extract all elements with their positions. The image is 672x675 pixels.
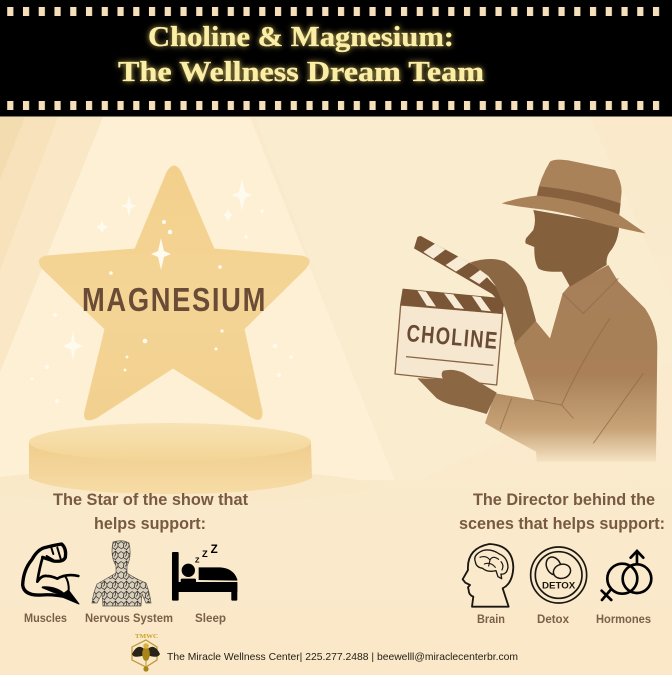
right icon labels (477, 612, 651, 626)
left heading: helps support: (94, 514, 206, 533)
upper hand (470, 259, 536, 343)
clapper stick (414, 236, 504, 307)
film strip title band (0, 0, 672, 116)
coat (485, 265, 657, 462)
title: Choline & Magnesium: (148, 21, 454, 53)
right icon labels: Brain (477, 612, 505, 626)
hat band (537, 186, 621, 214)
star sparkles (31, 179, 293, 403)
star label: MAGNESIUM (82, 281, 267, 318)
icon: brain (463, 544, 513, 607)
title (118, 21, 484, 88)
left icon labels: Sleep (195, 611, 226, 625)
icon: muscles (23, 544, 79, 604)
sprocket holes (7, 7, 662, 110)
icon: sleep (172, 543, 237, 601)
icon: detox (531, 547, 587, 603)
stage spotlights background (0, 117, 672, 503)
icon: nervous system (92, 541, 151, 606)
right heading: scenes that helps support: (459, 514, 665, 533)
title: The Wellness Dream Team (118, 56, 484, 88)
right heading: The Director behind the (473, 490, 655, 509)
snore letters: Z (195, 555, 200, 564)
left heading: The Star of the show that (53, 490, 248, 509)
icon: sleep: Z (202, 549, 208, 559)
director silhouette with clapperboard (395, 160, 657, 462)
icon: hormones (602, 551, 651, 600)
right icon labels: Hormones (596, 612, 651, 626)
footer logo: TMWC (135, 633, 158, 640)
clapperboard (395, 236, 505, 385)
icon: sleep: Z (211, 543, 218, 556)
footer logo (132, 633, 160, 672)
left icon labels: Nervous System (85, 611, 173, 625)
clapper label: CHOLINE (405, 320, 499, 355)
podium (29, 423, 312, 494)
footer contact text: The Miracle Wellness Center| 225.277.2488 | beewelll@miraclecenterbr.com (167, 651, 518, 663)
left icon labels (24, 611, 226, 625)
left icon labels: Muscles (24, 611, 67, 625)
board (395, 305, 503, 385)
right icon labels: Detox (537, 612, 569, 626)
right heading (459, 490, 665, 533)
coat folds (500, 278, 643, 443)
hat (502, 160, 646, 233)
head and neck (502, 160, 646, 287)
lower hand (417, 370, 497, 414)
left heading (53, 490, 248, 533)
icon: detox: DETOX (542, 580, 575, 590)
star: magnesium (31, 166, 309, 420)
